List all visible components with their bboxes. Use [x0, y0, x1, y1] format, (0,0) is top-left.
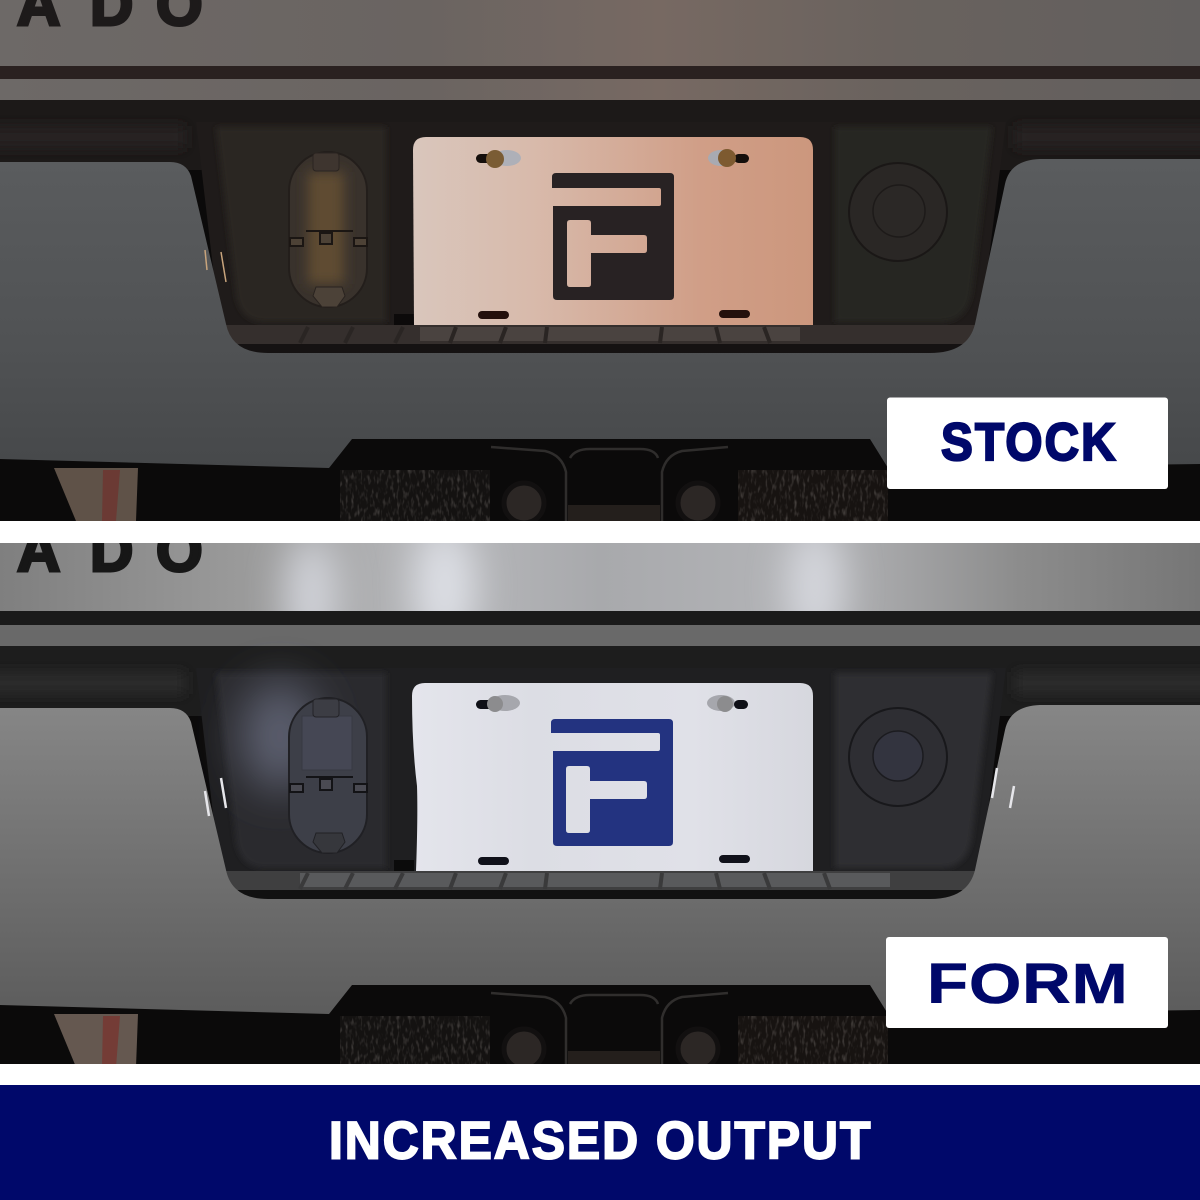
- plate logo: [551, 719, 673, 846]
- right recess face: [835, 127, 992, 322]
- connector top tab: [313, 699, 339, 717]
- rim reflection right: [992, 768, 1014, 808]
- hitch receiver: [491, 447, 728, 523]
- form label: FORM: [927, 953, 1128, 1016]
- bumper rim highlight: [268, 899, 930, 901]
- plate bottom left slot: [478, 311, 509, 319]
- tailgate dark stripe: [0, 66, 1200, 79]
- panel: form lighting photo: [0, 517, 1200, 1069]
- bottom banner: [0, 1085, 1200, 1200]
- right ledge: [1015, 672, 1200, 694]
- tire tread left: [340, 1016, 490, 1067]
- left hitch bolt: [506, 486, 542, 520]
- left ledge: [0, 672, 185, 694]
- bumper body: [0, 159, 1200, 468]
- plate logo: [552, 173, 674, 300]
- connector top tab: [313, 153, 339, 171]
- tire tread right: [738, 1016, 888, 1067]
- plate top left screw: [476, 695, 520, 712]
- right ledge: [1017, 128, 1200, 146]
- bolt slot: [394, 860, 414, 871]
- tire tread right: [738, 470, 888, 521]
- panel: stock lighting photo: [0, 0, 1200, 523]
- tailgate lettering: ADO: [17, 517, 203, 584]
- form label: [886, 937, 1168, 1028]
- plate top right screw: [708, 149, 749, 167]
- fuel cap: [849, 708, 947, 806]
- step strip: [215, 871, 985, 900]
- hitch receiver: [491, 993, 728, 1069]
- tailgate lower strip: [0, 625, 1200, 646]
- stock label: [887, 398, 1168, 489]
- trailer connector: [289, 152, 367, 307]
- object behind bumper: [54, 468, 138, 521]
- tailgate body panel: [0, 0, 1200, 104]
- license plate: [413, 137, 813, 325]
- right recess face: [835, 673, 992, 868]
- right hitch bolt: [678, 1029, 718, 1069]
- connector latch: [290, 231, 367, 246]
- left ledge: [0, 128, 183, 146]
- connector amber reflection: [308, 172, 344, 284]
- plate top left screw: [476, 150, 521, 168]
- tailgate body panel: [0, 543, 1200, 611]
- banner heading: INCREASED OUTPUT: [329, 1110, 870, 1170]
- right hitch bolt: [680, 486, 716, 520]
- connector latch: [290, 777, 367, 792]
- dark bumper channel: [0, 100, 1200, 170]
- plate bottom left slot: [478, 857, 509, 865]
- left recess face: [216, 673, 386, 868]
- rim reflection left: [205, 778, 226, 816]
- plate bottom right slot: [719, 310, 750, 318]
- object red stripe: [102, 470, 120, 521]
- connector bottom tab: [313, 287, 345, 307]
- tire tread left: [340, 470, 490, 521]
- step strip: [215, 325, 985, 354]
- plate top right screw: [707, 695, 748, 712]
- object behind bumper: [54, 1014, 138, 1067]
- stock label: STOCK: [941, 412, 1116, 472]
- light beams: [268, 543, 858, 611]
- bumper body: [0, 705, 1200, 1014]
- left hitch bolt: [504, 1029, 544, 1069]
- plate bottom right slot: [719, 855, 750, 863]
- recess panel: [196, 668, 1006, 891]
- left recess face: [216, 127, 386, 322]
- dark bumper channel: [0, 646, 1200, 716]
- fuel cap: [849, 163, 947, 261]
- recess panel: [202, 170, 1000, 325]
- bolt slot: [394, 314, 414, 325]
- bumper reflection left: [205, 250, 226, 282]
- license plate: [412, 683, 813, 871]
- tailgate dark stripe: [0, 611, 1200, 625]
- object red stripe: [102, 1016, 120, 1067]
- connector label panel: [302, 716, 352, 770]
- connector bottom tab: [313, 833, 345, 853]
- trailer connector: [289, 698, 367, 853]
- left recess glow: [240, 681, 320, 791]
